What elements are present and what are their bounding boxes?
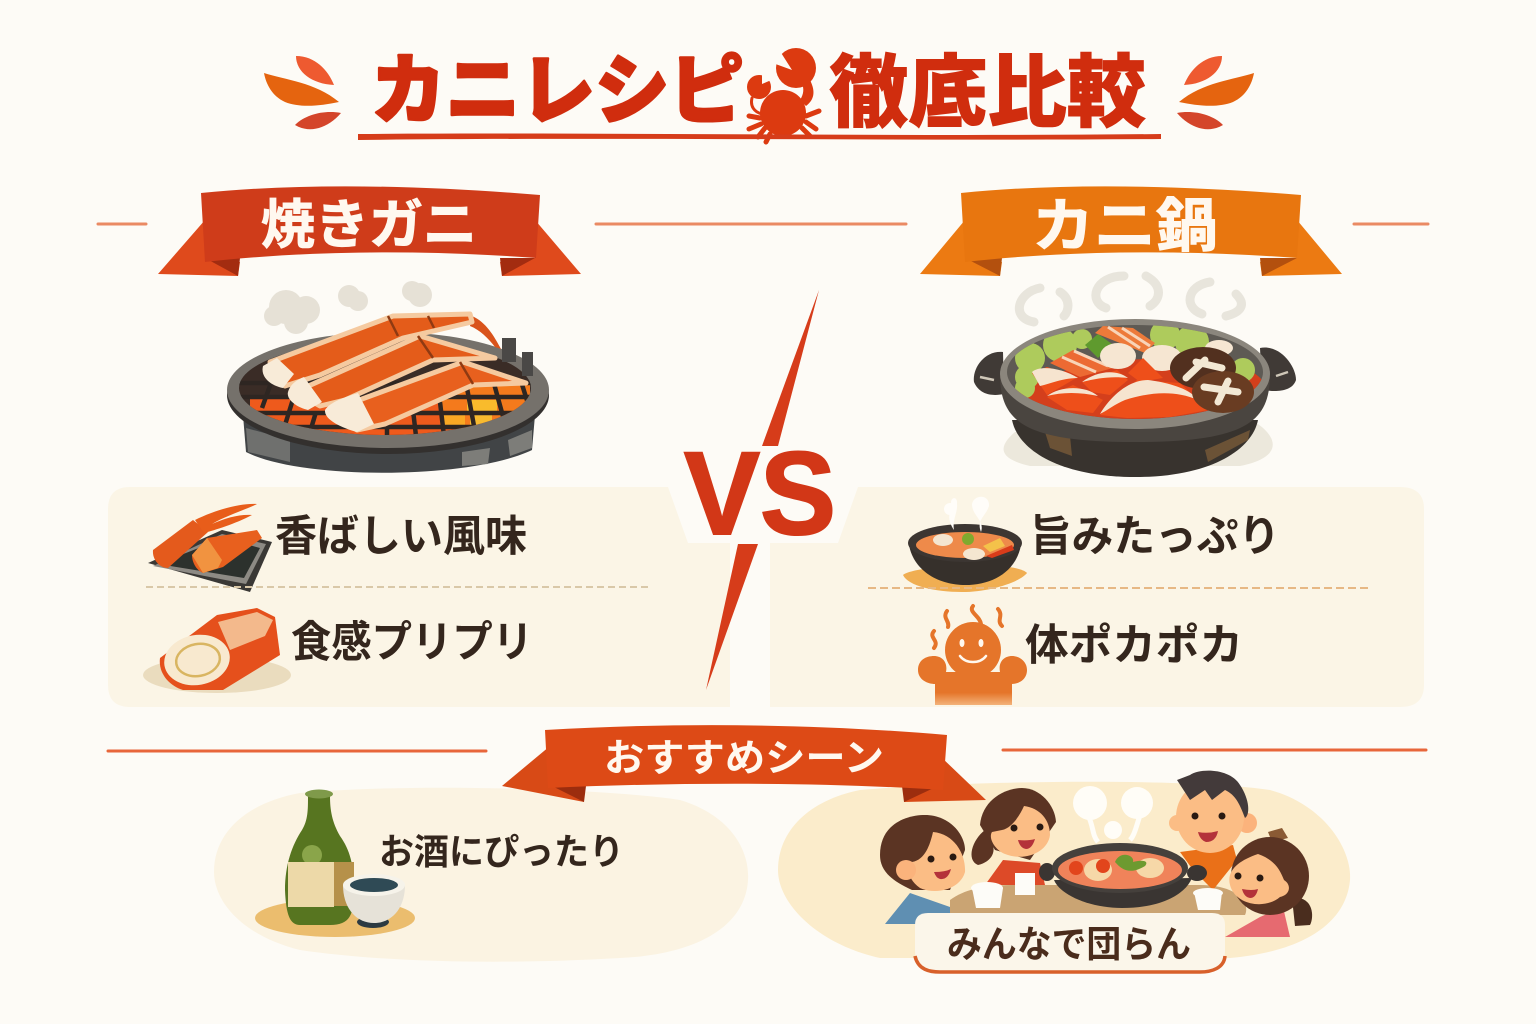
feature text: 体ポカポカ <box>1025 622 1243 670</box>
left panel background <box>108 487 730 707</box>
title <box>264 48 1254 142</box>
center nabe <box>1039 843 1207 908</box>
shiitake mushrooms <box>1170 347 1254 413</box>
right feature: warm body <box>918 606 1243 705</box>
icon: warm figure <box>918 606 1027 705</box>
left feature: aroma <box>148 504 527 592</box>
title text: recipe: カニレシピ <box>371 49 744 134</box>
person: father <box>1169 771 1257 890</box>
ribbon label: カニ鍋 <box>1032 194 1218 259</box>
ribbon: yakigani <box>158 186 581 276</box>
scene blob: sake <box>214 788 748 962</box>
coals and grate <box>239 341 531 435</box>
feature text: 香ばしい風味 <box>275 513 527 561</box>
icon: small hot pot <box>903 497 1027 592</box>
icon: crab <box>747 48 819 142</box>
rim <box>1000 348 1270 442</box>
ribbon label: おすすめシーン <box>604 738 884 780</box>
pot body <box>1012 420 1258 477</box>
greens <box>1015 320 1255 398</box>
steam <box>1073 786 1153 842</box>
icon: sake bottle and cup <box>255 790 415 937</box>
slash lower <box>706 544 758 690</box>
scene label: お酒にぴったり <box>379 831 624 872</box>
steam <box>264 281 432 334</box>
divider <box>146 586 652 588</box>
table <box>950 885 1246 915</box>
person: left child <box>880 815 965 924</box>
feature text: 食感プリプリ <box>291 619 533 667</box>
person: left girl <box>972 788 1056 885</box>
cups <box>971 873 1223 910</box>
feature text: 旨みたっぷり <box>1030 513 1280 561</box>
ribbon label: 焼きガニ <box>261 196 477 255</box>
grill base <box>243 415 535 473</box>
ribbon: recommended scenes <box>502 725 986 802</box>
divider <box>868 587 1372 589</box>
divider strokes <box>98 224 1428 751</box>
illustration: grilled crab on grill <box>227 281 549 473</box>
icon: crab meat cut <box>143 608 291 693</box>
slash upper <box>762 290 819 446</box>
scene: sake pairing <box>255 790 624 937</box>
VS emblem <box>684 290 836 690</box>
illustration: crab hot pot <box>974 276 1296 477</box>
right panel background <box>770 487 1424 707</box>
crab legs <box>263 314 526 432</box>
person: right girl <box>1225 828 1312 937</box>
steam <box>1019 276 1241 322</box>
VS text: VS <box>684 428 836 560</box>
scene blob: family <box>778 782 1350 958</box>
scene label <box>915 913 1225 972</box>
ribbon: kani nabe <box>920 186 1342 276</box>
icon: grilled crab on plate <box>148 504 272 592</box>
scene: family gathering <box>880 771 1312 972</box>
left feature: texture <box>143 608 533 693</box>
crab pieces <box>1032 326 1233 418</box>
grill handle <box>502 338 533 376</box>
handles <box>974 352 1004 395</box>
title text: comparison: 徹底比較 <box>829 48 1146 137</box>
leaf ornament left <box>264 56 341 129</box>
scene label: みんなで団らん <box>947 924 1191 965</box>
title underline <box>358 134 1161 140</box>
shadow <box>1004 424 1273 466</box>
leaf ornament right <box>1177 56 1254 129</box>
right feature: umami <box>903 497 1280 592</box>
